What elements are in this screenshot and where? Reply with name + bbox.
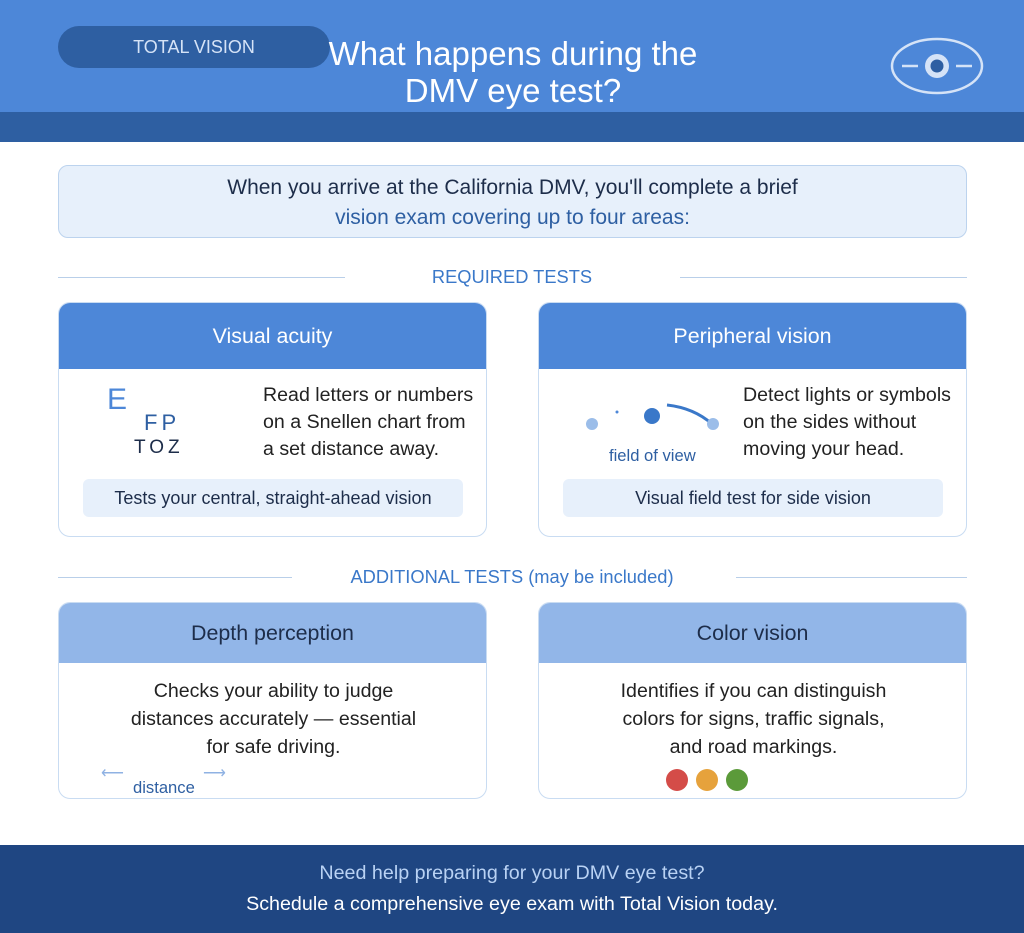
card header [59,303,486,369]
title: What happens during the [329,35,697,72]
text: Read letters or numbers [263,384,473,406]
section heading: additional tests: ADDITIONAL TESTS (may be included) [350,566,674,587]
card header: Visual acuity [213,324,332,348]
text [743,384,951,460]
brand pill: TOTAL VISION [133,36,255,56]
icon: snellen chart [107,383,184,458]
icon: eye [890,38,984,94]
panel: visual acuity [58,302,487,537]
text: on a Snellen chart from [263,411,466,433]
intro box: vision exam covering up to four areas: [335,206,690,229]
icon: distance arrows: distance [133,778,195,797]
icon: snellen chart: FP [144,410,180,435]
title [328,35,697,109]
intro box: When you arrive at the California DMV, you'll complete a brief [227,176,798,199]
text [263,384,473,460]
note: Tests your central, straight-ahead vision [114,488,432,508]
card header [539,303,966,369]
icon: field of view [586,404,719,430]
footer: Need help preparing for your DMV eye test? [319,862,705,884]
text: Detect lights or symbols [743,384,951,406]
header [0,0,1024,142]
title: DMV eye test? [405,72,621,109]
card header: Depth perception [191,620,354,644]
text: a set distance away. [263,438,439,460]
text: for safe driving. [207,736,340,758]
card header: Color vision [697,620,808,644]
icon: snellen chart: E [107,383,127,416]
panel: peripheral vision [538,302,967,537]
text [621,680,886,758]
text: moving your head. [743,438,904,460]
text: Checks your ability to judge [154,680,393,702]
footer [0,845,1024,933]
brand pill [58,26,330,68]
footer: Schedule a comprehensive eye exam with Total Vision today. [246,893,778,915]
icon: color dots [666,769,748,791]
intro box [58,165,967,238]
icon: distance arrows: ⟶ [203,765,226,782]
text [131,680,416,758]
section heading: required tests: REQUIRED TESTS [432,266,592,287]
note [83,479,463,517]
header dark band [0,112,1024,142]
note: Visual field test for side vision [635,488,871,508]
card header: Peripheral vision [673,324,832,348]
text: on the sides without [743,411,916,433]
card header [59,603,486,663]
text: and road markings. [670,736,837,758]
text: distances accurately — essential [131,708,416,730]
panel: color vision [538,602,967,799]
icon: distance arrows [101,765,226,797]
text: Identifies if you can distinguish [621,680,886,702]
card header [539,603,966,663]
icon: distance arrows: ⟵ [101,765,124,782]
label: field of view [609,446,696,465]
panel: depth perception [58,602,487,799]
icon: snellen chart: TOZ [134,437,184,458]
note [563,479,943,517]
text: colors for signs, traffic signals, [622,708,885,730]
